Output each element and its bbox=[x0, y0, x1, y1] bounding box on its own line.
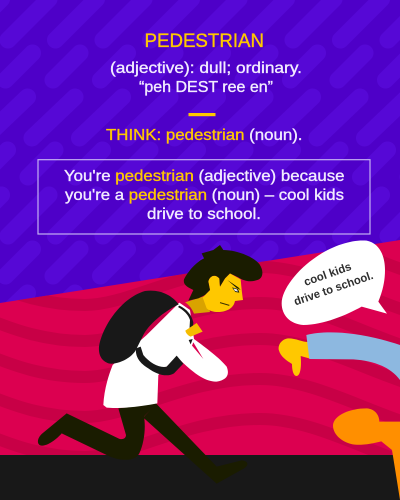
eye white bbox=[233, 288, 238, 292]
walking student bbox=[38, 245, 262, 484]
callout line 2: you're a pedestrian (noun) – cool kids bbox=[65, 187, 344, 204]
head bbox=[184, 245, 262, 314]
black ground bbox=[0, 455, 400, 500]
thumbs-down hand bbox=[279, 338, 310, 376]
yellow divider bbox=[188, 113, 216, 116]
front leg bbox=[143, 403, 247, 484]
neck bbox=[185, 296, 210, 314]
red wavy hill bbox=[0, 227, 400, 464]
shirt bbox=[103, 303, 228, 408]
think line: THINK: pedestrian (noun). bbox=[106, 127, 302, 144]
back leg bbox=[38, 403, 157, 460]
blue sleeve bbox=[306, 332, 400, 380]
speech text line 1: cool kids bbox=[302, 261, 353, 289]
backpack bbox=[99, 291, 179, 364]
orange figure bbox=[333, 408, 400, 500]
speech bubble and pointing arm bbox=[279, 240, 400, 500]
hand bbox=[185, 323, 203, 337]
definition: (adjective): dull; ordinary. bbox=[110, 60, 302, 77]
callout line 3: drive to school. bbox=[147, 206, 261, 223]
title: PEDESTRIAN bbox=[144, 30, 264, 52]
hair bbox=[184, 245, 262, 301]
pronunciation: “peh DEST ree en” bbox=[139, 79, 273, 96]
mouth bbox=[220, 303, 229, 305]
backpack strap bbox=[136, 306, 193, 375]
callout box bbox=[38, 160, 370, 234]
arm gap bbox=[192, 342, 203, 359]
speech bubble bbox=[282, 240, 387, 325]
eye and brow bbox=[227, 280, 241, 293]
callout line 1: You're pedestrian (adjective) because bbox=[64, 168, 345, 185]
face bbox=[203, 273, 243, 312]
speech text line 2: drive to school. bbox=[293, 270, 375, 308]
